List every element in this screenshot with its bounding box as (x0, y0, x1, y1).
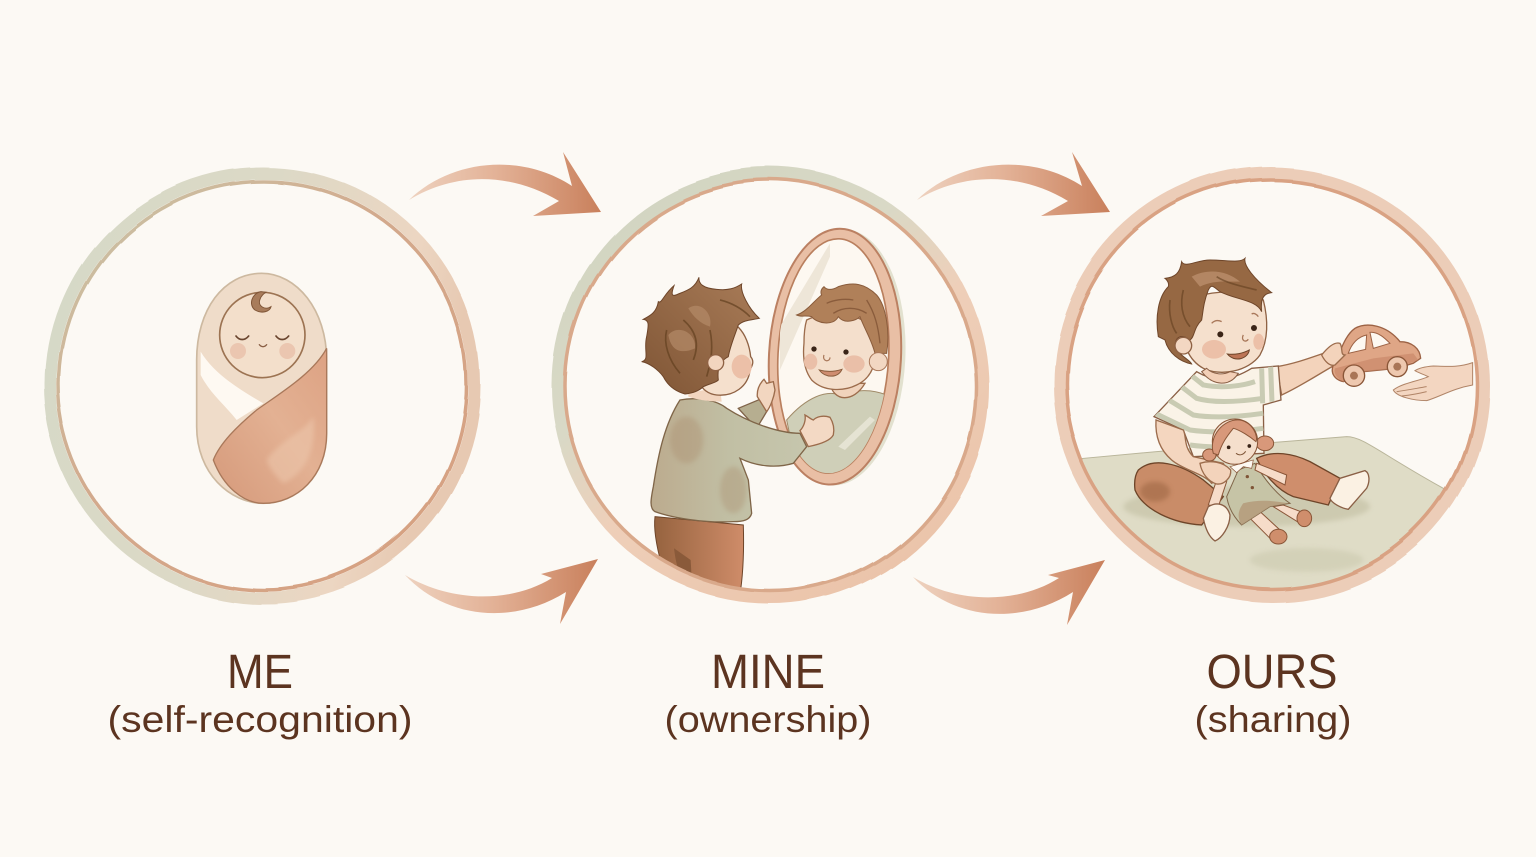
hair highlight (1192, 271, 1240, 287)
doll pigtails (1256, 436, 1274, 451)
hair (642, 277, 759, 394)
hair strands (666, 300, 750, 377)
arrow: bottom, me to mine (405, 559, 598, 624)
ear (1175, 337, 1192, 354)
wrap highlight (267, 417, 314, 483)
reflected mouth (819, 369, 842, 376)
neck (688, 387, 722, 402)
label: ours (1194, 646, 1352, 740)
doll eyes (1227, 445, 1230, 449)
near arm (1156, 420, 1228, 483)
label: mine: (ownership) (664, 699, 872, 740)
label: mine (664, 646, 872, 740)
t-shirt (1154, 366, 1281, 457)
mouth (1227, 350, 1249, 359)
reflected eyes (811, 346, 817, 352)
trousers (655, 517, 744, 590)
arrow: top, me to mine (409, 152, 601, 216)
label: me: ME (227, 646, 293, 699)
reflected neck (830, 383, 865, 398)
doll hair (1212, 420, 1257, 455)
eyebrows and nose (1212, 313, 1258, 341)
right sock (1330, 471, 1369, 509)
hair curl (251, 292, 271, 312)
reflected hair (797, 284, 888, 353)
label: me (108, 646, 412, 740)
cheeks (1202, 340, 1226, 359)
doll collar (1230, 460, 1253, 473)
cheeks (230, 343, 246, 359)
fingers on doll (1200, 462, 1231, 484)
illustration: toddler at the mirror (642, 225, 912, 590)
face (220, 292, 305, 378)
doll dress (1227, 463, 1290, 525)
closed eyes (236, 336, 289, 339)
left sock (1203, 504, 1230, 541)
reflected face (804, 314, 876, 389)
illustration: swaddled baby (197, 273, 327, 503)
head (1183, 292, 1267, 372)
sweater shading (670, 417, 703, 463)
reaching arm (1277, 352, 1335, 395)
mirror glass (772, 236, 895, 476)
arrow: bottom, mine to ours (913, 560, 1105, 625)
cheek (732, 355, 752, 379)
doll (1203, 419, 1312, 544)
doll head (1212, 419, 1258, 464)
hair (1157, 258, 1272, 364)
mirror shadow (765, 226, 912, 489)
label: mine: MINE (711, 646, 825, 699)
ring: ours (1061, 174, 1483, 596)
label: ours: (sharing) (1194, 699, 1352, 740)
arrow: top, mine to ours (917, 152, 1110, 216)
doll mouth (1236, 451, 1246, 455)
terracotta front wrap (213, 348, 327, 503)
mat shading (1123, 487, 1370, 527)
label: me: (self-recognition) (108, 699, 412, 740)
illustration: toddler sharing a toy (1073, 258, 1513, 640)
reflected nose (824, 355, 830, 361)
hair highlights (668, 306, 711, 351)
ring: mine (558, 174, 982, 598)
ear (708, 355, 724, 371)
reflected sweater (786, 390, 884, 474)
near hand (800, 415, 834, 447)
doll legs (1248, 505, 1305, 540)
glass glare (780, 243, 830, 370)
toy car (1332, 325, 1421, 386)
ring: me (51, 173, 475, 597)
receiving hand (1393, 363, 1473, 401)
shirt stripes (1155, 367, 1272, 447)
reflected cheeks (804, 354, 817, 370)
reflected hair strands (827, 299, 880, 343)
swaddle body (197, 273, 327, 503)
doll arms (1255, 463, 1287, 485)
hair strands (1170, 277, 1257, 333)
child's fingers on car (1322, 343, 1345, 365)
sweater (651, 399, 807, 522)
neck collar (1202, 368, 1238, 383)
reflection (780, 243, 888, 483)
head (696, 321, 753, 395)
right leg (1257, 453, 1340, 505)
play mat (1082, 436, 1444, 588)
eyes (1217, 331, 1223, 337)
left leg (1135, 463, 1223, 525)
nose (259, 345, 267, 347)
far hand (757, 379, 775, 412)
reflected ear (869, 353, 887, 371)
mirror frame (762, 225, 908, 488)
far arm (738, 399, 767, 428)
white inner wrap (201, 352, 263, 420)
doll buttons (1246, 475, 1249, 478)
label: ours: OURS (1206, 646, 1338, 699)
